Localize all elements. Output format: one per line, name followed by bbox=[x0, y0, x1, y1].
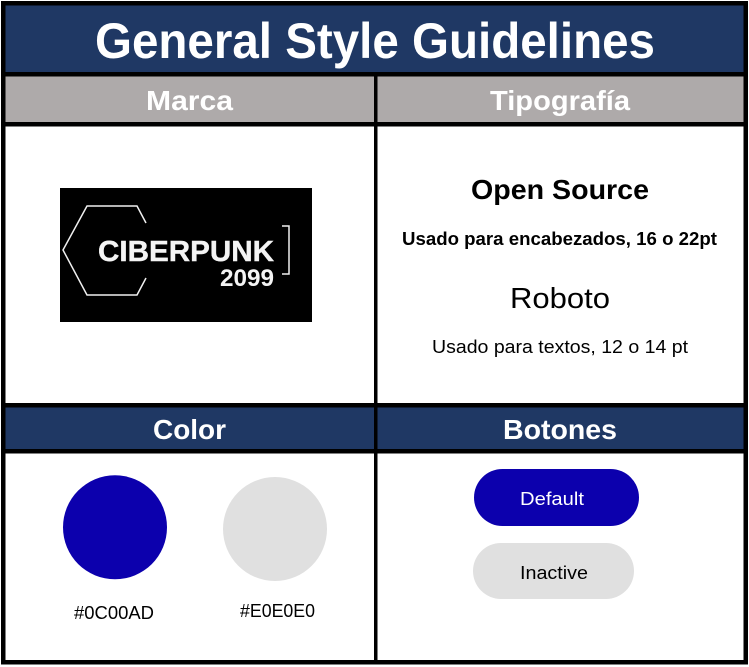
title banner: General Style Guidelines bbox=[95, 13, 655, 69]
logo: Ciberpunk 2099 bbox=[60, 188, 312, 322]
button: inactive bbox=[473, 543, 634, 599]
body text usage note: Usado para textos, 12 o 14 pt bbox=[432, 337, 688, 357]
heading: color bbox=[5, 406, 374, 450]
panel: color bbox=[5, 406, 374, 623]
swatch: blue bbox=[63, 475, 167, 579]
panel: tipografia bbox=[377, 76, 744, 357]
heading: marca bbox=[5, 76, 374, 123]
heading: marca: Marca bbox=[146, 85, 233, 116]
logo: Ciberpunk 2099: 2099 bbox=[220, 265, 274, 292]
font sample: Roboto: Roboto bbox=[510, 283, 610, 315]
heading: tipografia: Tipografía bbox=[490, 85, 630, 116]
heading usage note: Usado para encabezados, 16 o 22pt bbox=[402, 229, 717, 249]
panel: marca bbox=[5, 76, 374, 322]
button: inactive: Inactive bbox=[520, 563, 588, 583]
title banner bbox=[5, 5, 744, 73]
swatch: gray bbox=[223, 477, 327, 581]
swatch label: gray: #E0E0E0 bbox=[240, 601, 315, 621]
panel: botones bbox=[377, 406, 744, 599]
heading: botones: Botones bbox=[503, 414, 617, 445]
button: default bbox=[474, 469, 639, 526]
logo: Ciberpunk 2099: CIBERPUNK bbox=[98, 236, 274, 268]
font sample: Open Source: Open Source bbox=[471, 174, 649, 205]
heading: color: Color bbox=[153, 414, 226, 445]
button: default: Default bbox=[520, 489, 584, 509]
swatch label: blue: #0C00AD bbox=[74, 603, 154, 623]
heading: tipografia bbox=[377, 76, 744, 123]
heading: botones bbox=[377, 406, 744, 450]
